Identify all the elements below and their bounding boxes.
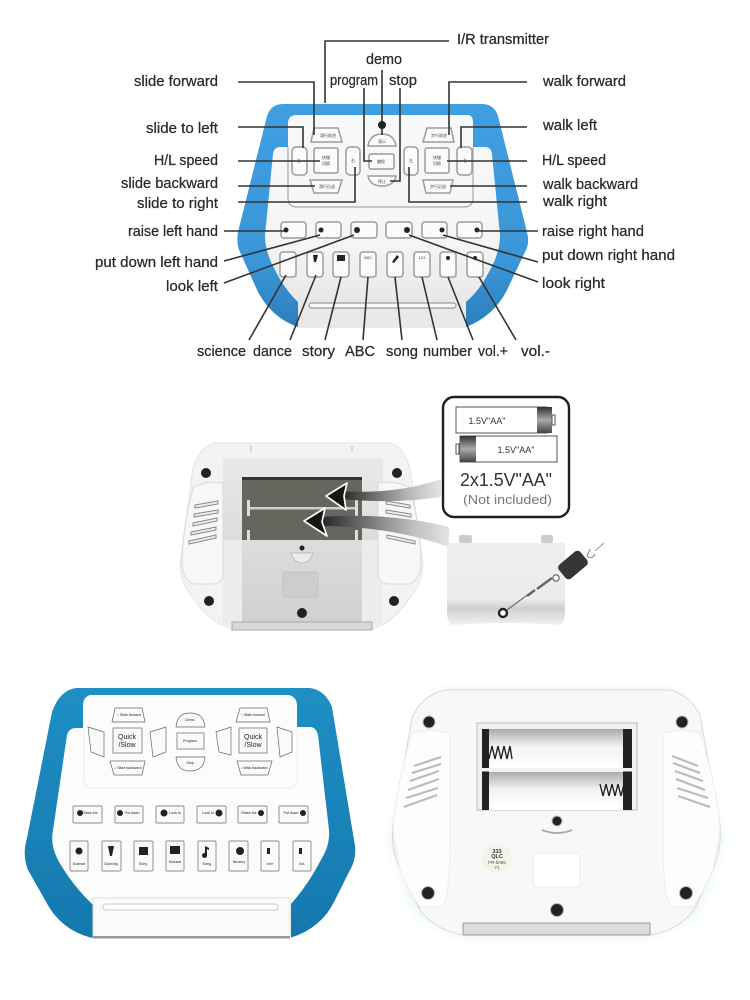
labels: top: I/R transmitter xyxy=(457,31,549,48)
callout: battery requirement: (Not included) xyxy=(463,493,552,507)
labels: right side: walk left xyxy=(542,117,598,134)
labels: bottom: vol.- xyxy=(521,343,550,360)
labels: bottom xyxy=(197,343,550,360)
arrow: batteries into compartment xyxy=(326,479,441,510)
buttons: right direction pad: 步行后退 xyxy=(430,183,446,189)
vents xyxy=(404,756,710,807)
keys: hand row: Look to xyxy=(202,811,214,815)
labels: left side: slide backward xyxy=(121,175,218,192)
buttons: demo program stop xyxy=(368,134,396,186)
sticker: FR-5085 xyxy=(488,860,506,865)
labels: left side: put down left hand xyxy=(95,254,218,271)
callout: battery requirement: 2x1.5V"AA" xyxy=(460,470,552,490)
keys: left direction pad: ↓ Slide backward xyxy=(114,766,142,770)
callout: battery requirement xyxy=(443,397,569,517)
keys: right direction pad: /Slow xyxy=(244,742,262,749)
device: blue remote body xyxy=(237,104,528,328)
battery 1: 1.5V"AA" xyxy=(469,416,505,426)
buttons: right direction pad: 步行前进 xyxy=(431,132,447,138)
labels: left side xyxy=(95,73,219,295)
buttons: left direction pad: 滑行后退 xyxy=(319,183,335,189)
panel: remote control button diagram xyxy=(95,31,675,360)
labels: left side: raise left hand xyxy=(128,223,218,240)
keys: demo program stop: Program xyxy=(183,739,197,743)
keys: left direction pad: Quick xyxy=(118,734,136,741)
buttons: left direction pad: 滑行前进 xyxy=(320,132,336,138)
arrow: cover onto compartment xyxy=(304,508,449,547)
labels: bottom: story xyxy=(302,343,335,360)
buttons: left direction pad: 切换 xyxy=(322,160,330,166)
keys: hand row: Raise the xyxy=(82,811,98,815)
leader lines xyxy=(224,41,538,340)
sticker: 333 xyxy=(492,849,502,855)
labels: top: program xyxy=(330,72,378,89)
labels: left side: H/L speed xyxy=(154,152,218,169)
battery cover with screwdriver xyxy=(447,535,604,625)
buttons: right direction pad: 切换 xyxy=(433,160,441,166)
sticker: QLC xyxy=(491,854,503,860)
keys: hand row: Raise the xyxy=(241,811,257,815)
labels: right side: walk right xyxy=(542,193,608,210)
labels: top: demo xyxy=(366,51,402,68)
labels: bottom: song xyxy=(386,343,418,360)
buttons: right direction pad: 右 xyxy=(463,157,467,163)
keys: function row: Vol- xyxy=(299,862,306,866)
keys: function row: Vol+ xyxy=(266,862,274,866)
buttons: left direction pad xyxy=(292,128,360,193)
labels: right side: put down right hand xyxy=(542,247,675,264)
buttons: function row: ABC xyxy=(364,255,372,260)
battery 2: 1.5V"AA" xyxy=(498,445,534,455)
keys: function row: Dancing xyxy=(104,862,118,866)
screws xyxy=(201,468,402,618)
keys: function row: Story xyxy=(139,862,147,866)
buttons: demo program stop: 编程 xyxy=(377,158,385,164)
keys: left direction pad xyxy=(88,708,166,775)
labels: left side: slide to left xyxy=(146,120,219,137)
keys: function row: Science xyxy=(73,862,85,866)
labels: top xyxy=(330,31,549,89)
buttons: right direction pad: 快慢 xyxy=(433,154,441,160)
keys: hand row xyxy=(73,806,308,823)
buttons: right direction pad: 左 xyxy=(409,157,413,163)
labels: bottom: vol.+ xyxy=(478,343,508,360)
keys: function row: Song xyxy=(203,862,211,866)
keys: right direction pad: ↑ Walk forward xyxy=(241,713,265,717)
buttons: right direction pad xyxy=(404,128,472,193)
buttons: left direction pad: 左 xyxy=(297,157,301,163)
battery compartment with springs xyxy=(477,723,637,810)
labels: right side: raise right hand xyxy=(542,223,644,240)
buttons: demo program stop: 演示 xyxy=(378,138,386,144)
keys: right direction pad xyxy=(216,708,292,775)
labels: left side: slide forward xyxy=(134,73,218,90)
buttons: function row: 123 xyxy=(419,255,426,260)
keys: hand row: Put down xyxy=(125,811,139,815)
labels: bottom: science xyxy=(197,343,246,360)
labels: bottom: ABC xyxy=(345,343,375,360)
buttons: function row xyxy=(280,252,483,277)
panel: battery installation xyxy=(180,397,604,630)
buttons: left direction pad: 右 xyxy=(351,157,355,163)
panel: photo of remote back xyxy=(392,690,720,935)
labels: left side: slide to right xyxy=(137,195,219,212)
sticker: Y1 xyxy=(494,865,500,870)
labels: right side: walk forward xyxy=(542,73,626,90)
device: back of remote xyxy=(180,443,423,630)
keys: right direction pad: ↓ Walk backward xyxy=(240,766,268,770)
labels: right side: look right xyxy=(542,275,606,292)
keys: hand row: Look to xyxy=(169,811,181,815)
glow xyxy=(393,693,720,933)
keys: demo program stop xyxy=(176,713,205,771)
keys: hand row: Put down xyxy=(284,811,298,815)
labels: bottom: number xyxy=(423,343,472,360)
panel: photo of remote front xyxy=(25,688,355,938)
labels: right side xyxy=(542,73,675,292)
keys: function row: Musical xyxy=(169,860,181,864)
buttons: hand and look row xyxy=(281,222,482,238)
keys: demo program stop: Demo xyxy=(185,718,195,722)
keys: left direction pad: /Slow xyxy=(118,742,136,749)
labels: left side: look left xyxy=(166,278,219,295)
keys: function row xyxy=(70,841,311,871)
vents xyxy=(189,501,415,544)
keys: demo program stop: Stop xyxy=(186,761,194,765)
keys: right direction pad: Quick xyxy=(244,734,262,741)
battery compartment xyxy=(242,477,362,540)
buttons: left direction pad: 快慢 xyxy=(322,154,330,160)
screws xyxy=(422,716,692,916)
labels: right side: walk backward xyxy=(542,176,638,193)
keys: function row: Nursery xyxy=(233,860,245,864)
keys: left direction pad: ↑ Slide forward xyxy=(117,713,141,717)
sticker xyxy=(482,843,512,873)
labels: top: stop xyxy=(389,72,417,89)
device: blue shell xyxy=(25,688,355,938)
device: white back shell xyxy=(392,690,720,935)
buttons: demo program stop: 停止 xyxy=(378,178,386,184)
labels: bottom: dance xyxy=(253,343,292,360)
labels: right side: H/L speed xyxy=(542,152,606,169)
